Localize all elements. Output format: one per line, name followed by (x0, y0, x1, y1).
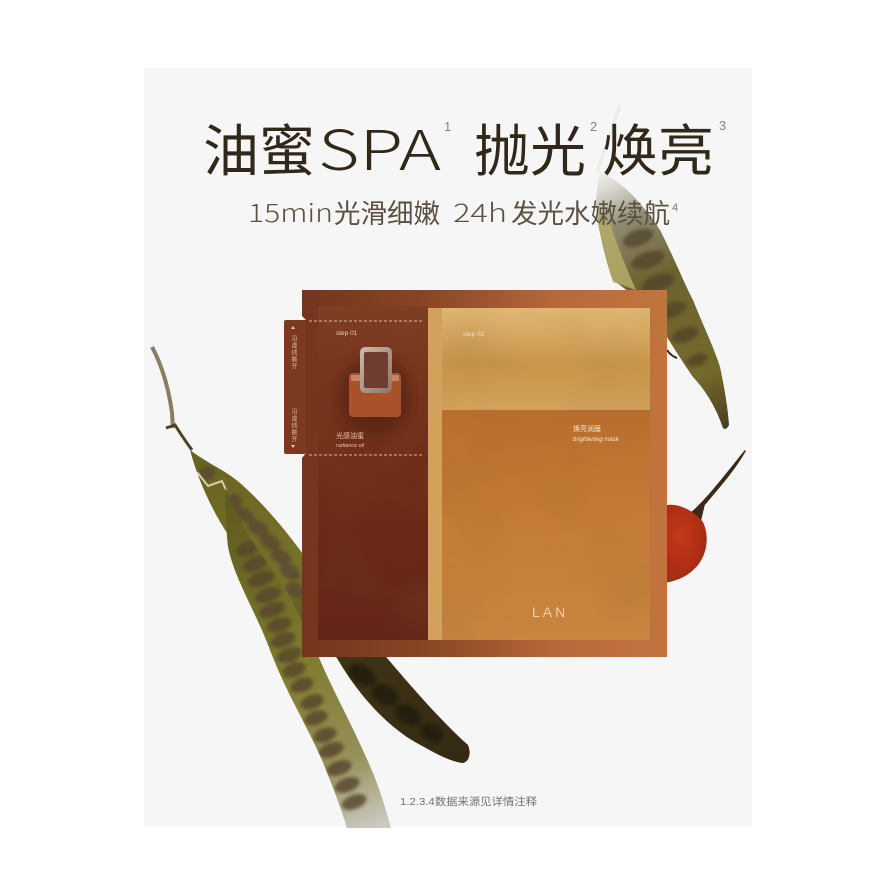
title: SPA (318, 106, 441, 186)
title: 抛光 (474, 120, 586, 183)
right panel: step 02: step 02 (463, 331, 485, 338)
right panel: step 02: brightening mask (573, 437, 620, 443)
title: 1 (444, 119, 451, 134)
sachet body frame (302, 290, 667, 657)
tear tab (284, 320, 306, 454)
tomato fruit with stem (660, 451, 745, 583)
subtitle: 4 (672, 202, 678, 214)
subtitle: 15min (248, 194, 333, 230)
pod: top right (596, 105, 729, 429)
tear tab: 沿虚线撕开 (290, 407, 297, 443)
title: 油蜜 (203, 120, 315, 183)
subtitle: 24h (453, 194, 507, 230)
left panel: step 01 (309, 306, 428, 640)
left panel: step 01: radiance oil (336, 443, 365, 449)
title: 焕亮 (602, 120, 714, 183)
left panel: step 01: step 01 (336, 330, 358, 337)
right panel: step 02 (442, 308, 650, 640)
title: 3 (719, 118, 726, 133)
tear tab: 沿虚线撕开 (290, 334, 297, 370)
oil capsule icon (349, 347, 401, 417)
right panel: step 02: 焕亮润膜 (573, 424, 601, 433)
subtitle: 光滑细嫩 (334, 199, 440, 229)
pod: front left (225, 487, 391, 828)
footnote: 1.2.3.4数据来源见详情注释 (400, 795, 538, 808)
product sachet (284, 290, 667, 657)
right panel: step 02: LAN (532, 604, 568, 620)
title: 2 (590, 119, 597, 134)
strip (428, 308, 442, 640)
subtitle: 发光水嫩续航 (511, 199, 670, 229)
background panel (144, 68, 752, 827)
title (203, 106, 726, 186)
subtitle (248, 194, 678, 230)
pod: back left with stem (152, 347, 470, 763)
left panel: step 01: 光感油蜜 (336, 431, 364, 440)
